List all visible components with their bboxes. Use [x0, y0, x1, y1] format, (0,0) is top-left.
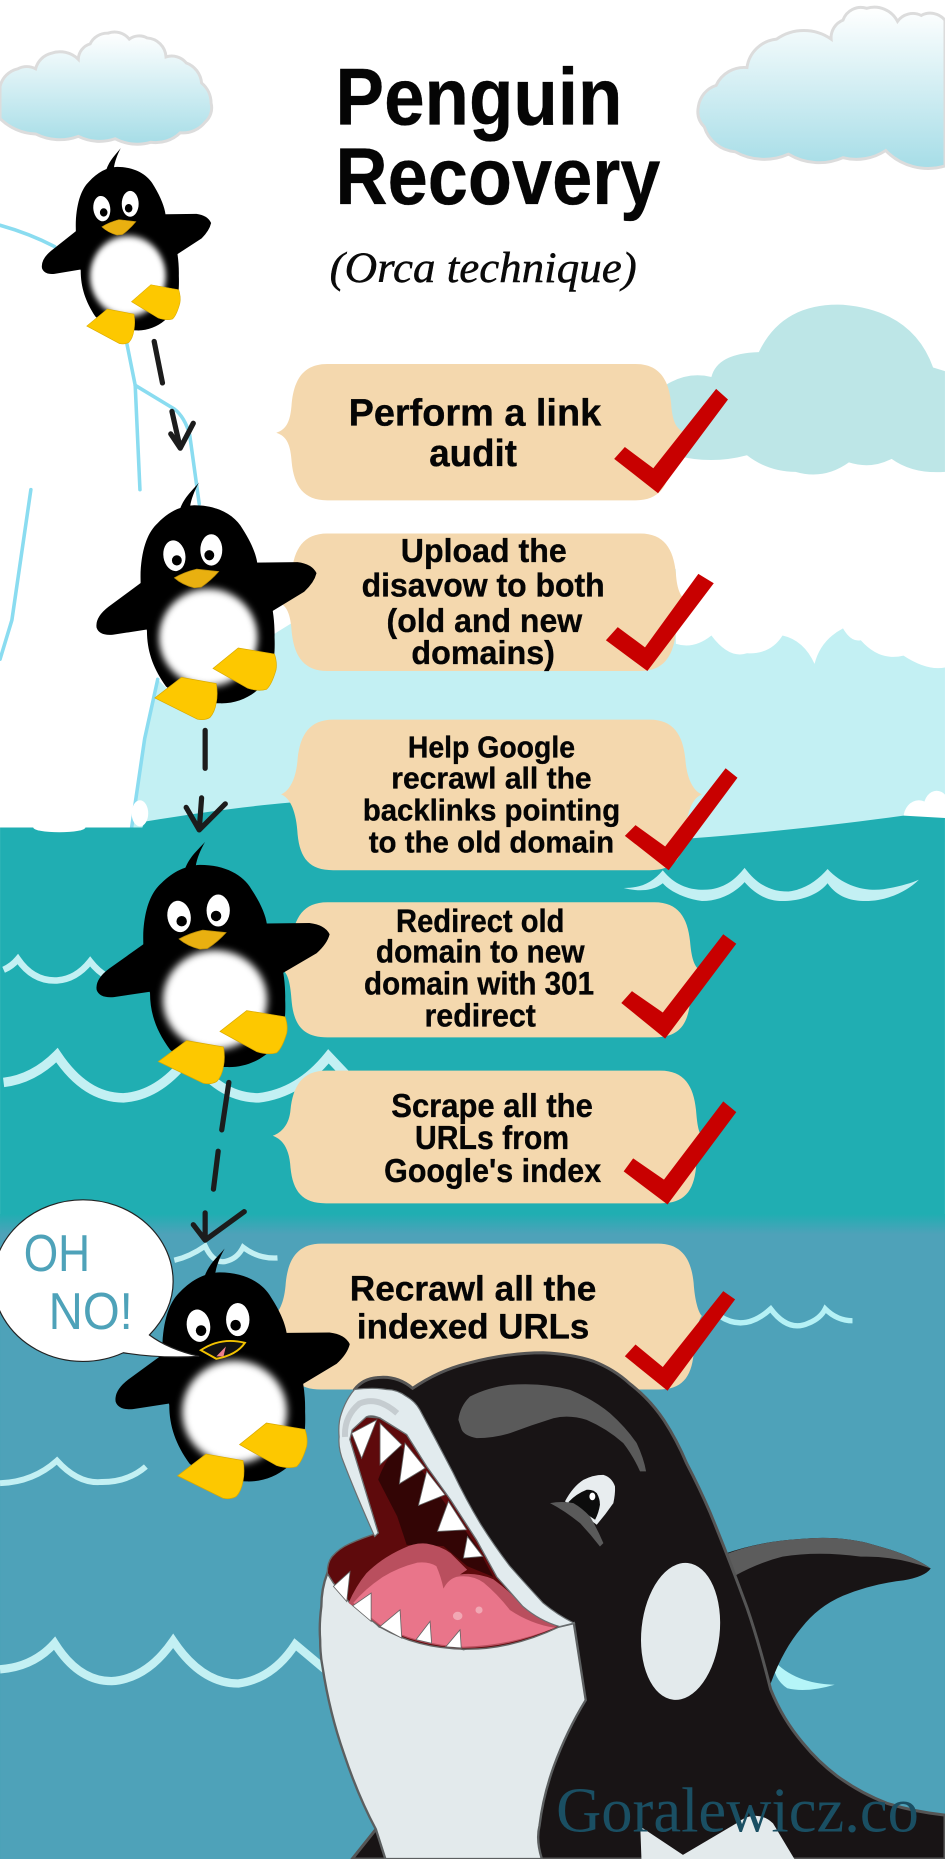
step 3 text: recrawl all the [391, 760, 592, 795]
exclamation text: OH [24, 1225, 90, 1283]
step 2 text [362, 533, 605, 672]
subtitle: (Orca technique) [330, 244, 637, 292]
penguin 3 [96, 842, 330, 1084]
exclamation text [24, 1225, 133, 1341]
orca eye [550, 1475, 615, 1546]
step 3 text: to the old domain [369, 824, 614, 859]
step 2 text: (old and new [387, 603, 582, 640]
orca [320, 1353, 945, 1859]
step 6 text: Recrawl all the [350, 1269, 596, 1309]
step 4 check [621, 934, 736, 1039]
orca jaw shading [345, 1401, 397, 1437]
step 5 panel [273, 1071, 702, 1203]
step 4 panel [282, 902, 700, 1037]
step 2 [279, 533, 714, 672]
step 2 panel [279, 534, 690, 671]
step 4 text: domain to new [376, 934, 585, 970]
arrow 3 [193, 1082, 244, 1240]
step 3 check [625, 768, 737, 870]
penguin 1 [42, 148, 211, 344]
water transition [0, 1214, 945, 1234]
orca teeth [333, 1420, 483, 1648]
ice lumps at waterline [33, 800, 148, 832]
cloud top left [0, 32, 212, 144]
step 3 text: Help Google [408, 730, 575, 765]
step 6 [273, 1244, 735, 1391]
step 5 text: Google's index [384, 1153, 602, 1190]
title [336, 52, 661, 222]
bubble shape [0, 1200, 199, 1361]
penguin 4 with open mouth [115, 1248, 350, 1499]
step 2 text: disavow to both [362, 567, 605, 604]
step 2 check [606, 574, 714, 671]
step 6 text: indexed URLs [357, 1307, 589, 1347]
step 1 check [614, 389, 728, 493]
step 4 text: redirect [424, 998, 536, 1034]
deep water [0, 1233, 945, 1859]
penguin 2 [96, 483, 317, 720]
speech bubble [0, 1200, 199, 1361]
title: Penguin [336, 52, 622, 142]
step 3 panel [281, 720, 702, 870]
title: Recovery [336, 132, 661, 222]
step 4 text: domain with 301 [364, 966, 594, 1002]
step 3 text: backlinks pointing [363, 792, 620, 827]
step 5 text [384, 1088, 602, 1190]
step 1 panel [276, 364, 685, 500]
step 2 text: domains) [411, 635, 555, 672]
exclamation text: NO! [49, 1283, 133, 1341]
sea [0, 803, 945, 1859]
step 5 [273, 1071, 736, 1205]
orca white eye patch [634, 1559, 727, 1704]
step 6 check [625, 1291, 735, 1391]
step 3 [281, 720, 737, 870]
orca white belly [320, 1573, 586, 1859]
arrow 2 [186, 730, 225, 830]
step 4 text: Redirect old [396, 903, 564, 939]
orca mouth [327, 1417, 560, 1649]
step 4 text [364, 903, 594, 1034]
waves [0, 868, 919, 1690]
watermark: Goralewicz.co [556, 1775, 919, 1846]
orca upper jaw band [339, 1388, 574, 1627]
orca tongue spots [453, 1606, 483, 1620]
step 6 panel [273, 1244, 702, 1390]
orca tongue [353, 1562, 555, 1647]
iceberg cracks [0, 225, 199, 828]
orca fin highlight [726, 1538, 931, 1576]
step 5 check [624, 1101, 736, 1205]
step 1 text [349, 393, 602, 475]
step 1 text: Perform a link [349, 393, 602, 435]
step 3 text [363, 730, 620, 859]
step 6 text [350, 1269, 596, 1347]
step 5 text: URLs from [415, 1120, 569, 1157]
step 2 text: Upload the [401, 533, 567, 570]
orca lower white notch [640, 1816, 794, 1859]
large background cloud [665, 305, 945, 475]
step 4 [282, 902, 736, 1039]
step 5 text: Scrape all the [391, 1088, 593, 1125]
orca tongue outer [349, 1543, 557, 1648]
white ice clump right [903, 791, 945, 843]
orca head patch [458, 1384, 646, 1471]
step 1 [276, 364, 728, 500]
distant ice shelf [132, 569, 945, 842]
orca body [352, 1353, 945, 1859]
step 1 text: audit [429, 433, 517, 475]
cloud top right [698, 7, 945, 168]
arrow 1 [154, 341, 193, 448]
orca fin [723, 1538, 931, 1684]
orca throat [378, 1443, 493, 1577]
